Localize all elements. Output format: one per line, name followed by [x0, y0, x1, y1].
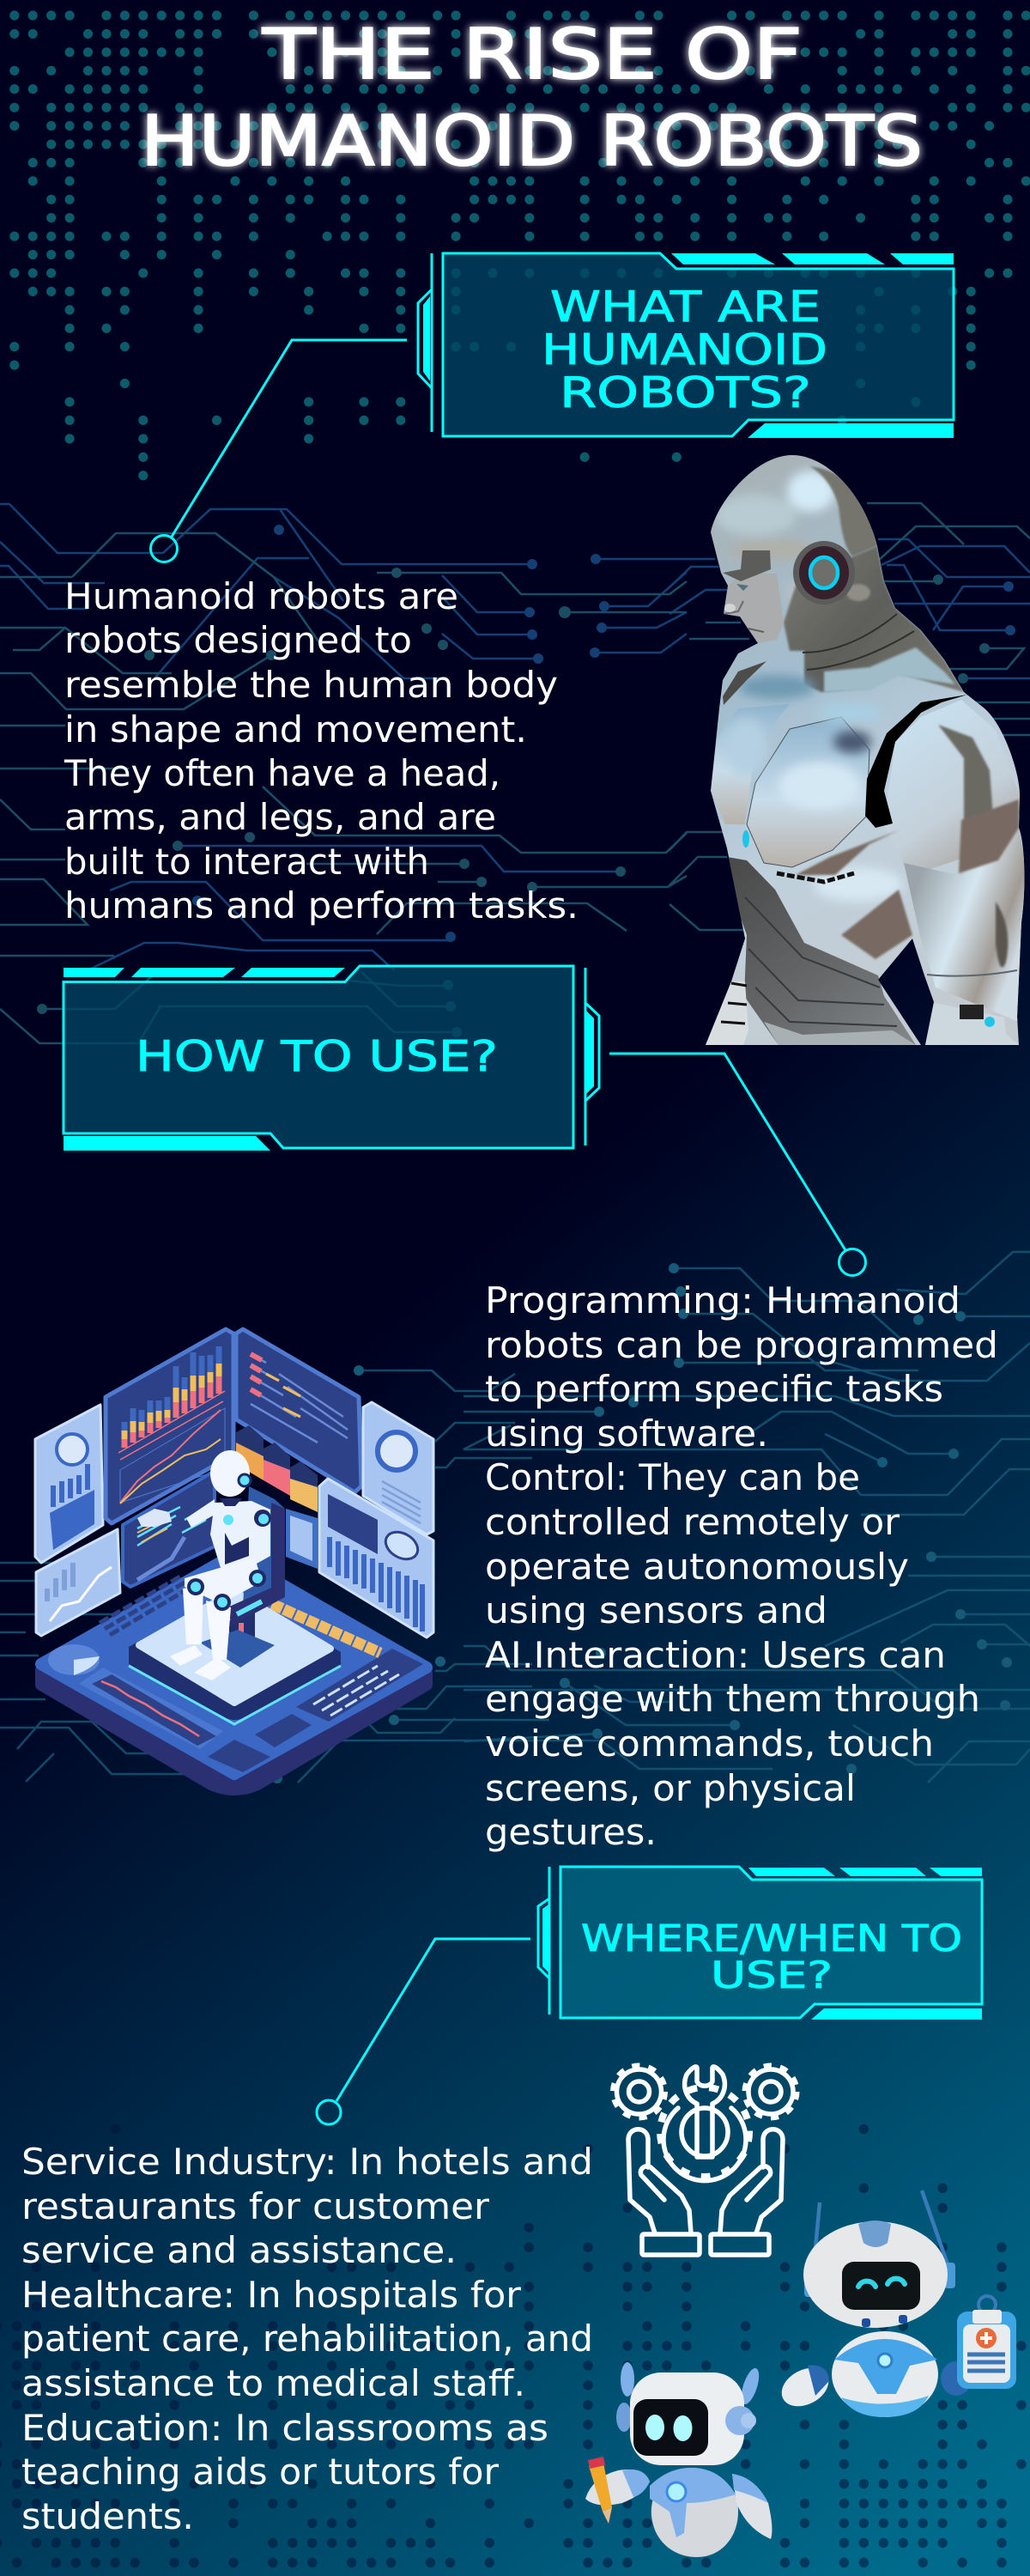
- title: THE RISE OF: [262, 15, 803, 94]
- text: how to use: engage with them through: [485, 1678, 980, 1720]
- floor plate: [41, 1670, 427, 1789]
- text: how to use: using software.: [485, 1413, 768, 1455]
- text: how to use: AI.Interaction: Users can: [485, 1634, 946, 1676]
- panel: how to use: [64, 966, 599, 1151]
- text: how to use: [485, 1279, 998, 1853]
- panel heading: WHAT ARE: [550, 283, 821, 331]
- text: how to use: operate autonomously: [485, 1546, 909, 1588]
- text: how to use: robots can be programmed: [485, 1324, 998, 1366]
- text: where when to use: Healthcare: In hospitals for: [21, 2274, 522, 2316]
- forearm: [904, 828, 1027, 1022]
- panel: what are humanoid robots: [418, 253, 954, 438]
- text: definition: They often have a head,: [64, 752, 500, 794]
- neck and collar plates: [784, 546, 964, 692]
- seated robot: [137, 1450, 285, 1680]
- text: where when to use: restaurants for customer: [21, 2185, 490, 2227]
- text: how to use: Control: They can be: [485, 1456, 860, 1498]
- text: definition: Humanoid robots are: [64, 575, 458, 617]
- connector: where when to text: [317, 1939, 530, 2124]
- left pectoral: [711, 704, 790, 824]
- brown reflections: [796, 799, 1019, 959]
- panel heading: [581, 1917, 962, 1997]
- text: definition: [64, 575, 579, 927]
- ear disc: [793, 541, 855, 605]
- background dots: bottom: [0, 2129, 1021, 2562]
- text: definition: built to interact with: [64, 841, 429, 883]
- connector: how to use to text: [609, 1054, 865, 1276]
- icon: hands holding gears and wrench: [613, 2066, 797, 2255]
- text: where when to use: students.: [21, 2495, 194, 2537]
- text: where when to use: [21, 2141, 593, 2537]
- panel heading: USE?: [711, 1954, 833, 1997]
- text: how to use: screens, or physical: [485, 1767, 856, 1809]
- illustration: nurse robot with clipboard: [775, 2190, 1016, 2417]
- text: definition: in shape and movement.: [64, 708, 527, 750]
- text: how to use: Programming: Humanoid: [485, 1279, 960, 1321]
- screens: [35, 1405, 103, 1563]
- circuit lines: upper band, teal traces: [0, 503, 1030, 1043]
- panel: where when to use: [538, 1867, 982, 2020]
- background dots: top: [15, 15, 1026, 476]
- panel heading: WHERE/WHEN TO: [581, 1917, 962, 1960]
- wrist band: [925, 1002, 1019, 1045]
- title: HUMANOID ROBOTS: [141, 101, 923, 181]
- panel heading: ROBOTS?: [560, 368, 811, 417]
- title: THE RISE OF: [262, 15, 803, 94]
- connector: heading to definition: [151, 340, 407, 562]
- central platform: [129, 1589, 341, 1720]
- text: definition: robots designed to: [64, 619, 412, 661]
- upper chest reflections: [726, 675, 903, 902]
- chest indicator: [742, 830, 749, 848]
- text: definition: arms, and legs, and are: [64, 796, 496, 838]
- text: definition: resemble the human body: [64, 664, 558, 706]
- text: where when to use: service and assistance.: [21, 2229, 457, 2271]
- panel heading: [542, 283, 827, 417]
- text: where when to use: patient care, rehabilitation, and: [21, 2318, 593, 2360]
- text: definition: humans and perform tasks.: [64, 884, 579, 927]
- shoulder: [884, 700, 1020, 876]
- text: how to use: using sensors and: [485, 1589, 827, 1631]
- hand: [706, 981, 748, 1045]
- pencil: [588, 2457, 612, 2524]
- panel heading: HUMANOID: [542, 325, 827, 374]
- illustration: isometric robot at control station: [35, 1329, 433, 1789]
- right pectoral: [747, 717, 869, 867]
- circuit lines: upper band, blue traces: [0, 504, 1030, 970]
- panel heading: HOW TO USE?: [136, 1032, 498, 1081]
- text: how to use: voice commands, touch: [485, 1722, 934, 1765]
- face: [724, 574, 784, 643]
- text: where when to use: Education: In classrooms as: [21, 2407, 548, 2449]
- illustration: teacher robot with pencil: [585, 2362, 772, 2557]
- text: where when to use: teaching aids or tutors for: [21, 2451, 500, 2493]
- illustration: silver humanoid robot: [704, 451, 1030, 1048]
- text: how to use: controlled remotely or: [485, 1501, 900, 1543]
- clipboard: [957, 2296, 1016, 2389]
- head shading: [714, 471, 835, 603]
- text: where when to use: Service Industry: In hotels and: [21, 2141, 593, 2183]
- circuit lines: middle band: [0, 1252, 1030, 1783]
- text: how to use: gestures.: [485, 1811, 657, 1853]
- lower torso plates: [727, 857, 916, 1045]
- title: [141, 15, 923, 181]
- text: how to use: to perform specific tasks: [485, 1368, 943, 1410]
- text: where when to use: assistance to medical staff.: [21, 2362, 525, 2404]
- title: HUMANOID ROBOTS: [141, 101, 923, 181]
